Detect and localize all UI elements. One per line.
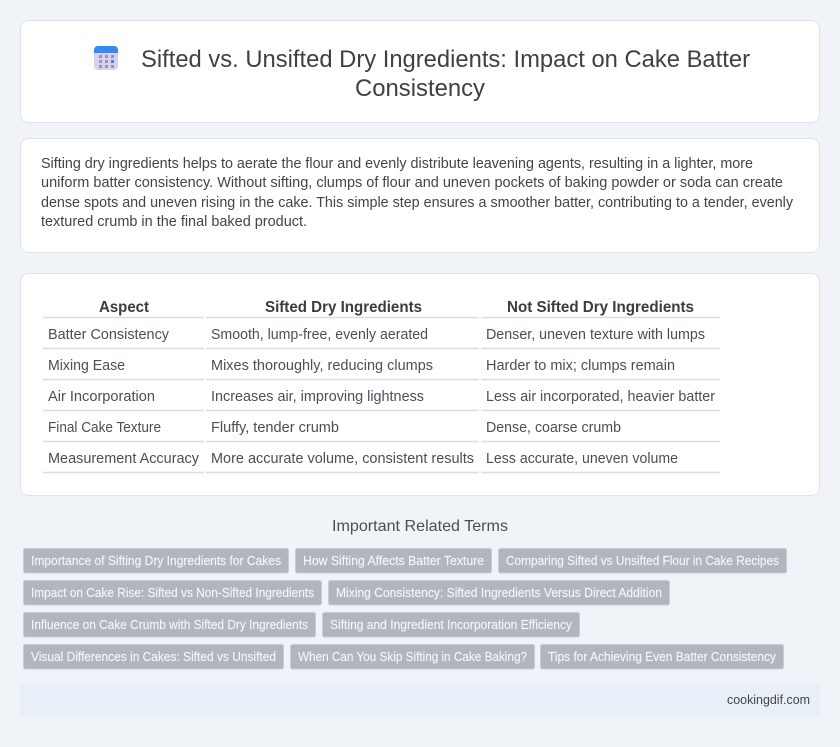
header panel: [20, 20, 820, 122]
table header: Aspect: [99, 299, 150, 316]
related term tags: [24, 548, 786, 669]
tag 9: When Can You Skip Sifting in Cake Baking?: [298, 650, 527, 664]
title: Consistency: [355, 75, 485, 102]
tag 1: [24, 548, 288, 573]
table header: [99, 299, 694, 316]
footer: cookingdif.com: [727, 693, 810, 707]
footer: [20, 683, 820, 717]
row: mixing ease: [48, 358, 675, 374]
tag 10: Tips for Achieving Even Batter Consistency: [548, 650, 777, 664]
row: air incorporation: Less air incorporated, heavier batter: [486, 389, 715, 405]
table header: Not Sifted Dry Ingredients: [507, 299, 694, 316]
panel: intro paragraph: [20, 138, 820, 252]
tag 5: Mixing Consistency: Sifted Ingredients Versus Direct Addition: [336, 586, 662, 600]
row: final cake texture: Final Cake Texture: [48, 420, 161, 436]
tag 3: [498, 548, 786, 573]
tag 9: [290, 644, 534, 669]
tag 8: [24, 644, 284, 669]
panel: intro paragraph: dense spots and uneven rising in the cake. This simple step ensures a smoother batter, contributing to a tender, evenly: [41, 195, 794, 211]
panel: intro paragraph: Sifting dry ingredients helps to aerate the flour and evenly distribute leavening agents, resulting in a lighter, more: [41, 156, 753, 172]
related terms heading: Important Related Terms: [332, 518, 508, 535]
row: air incorporation: [48, 389, 715, 405]
row: air incorporation: Increases air, improving lightness: [211, 389, 424, 405]
tag 10: [540, 644, 784, 669]
row: measurement accuracy: Measurement Accuracy: [48, 451, 200, 467]
row: measurement accuracy: More accurate volume, consistent results: [211, 451, 474, 467]
panel: intro paragraph: textured crumb in the final baked product.: [41, 214, 307, 230]
title: Sifted vs. Unsifted Dry Ingredients: Impact on Cake Batter: [141, 46, 750, 73]
tag 4: Impact on Cake Rise: Sifted vs Non-Sifted Ingredients: [31, 586, 314, 600]
row: batter consistency: Smooth, lump-free, evenly aerated: [211, 327, 428, 343]
panel: comparison table: [20, 274, 820, 496]
row: batter consistency: Batter Consistency: [48, 327, 170, 343]
row: final cake texture: [48, 420, 621, 436]
tag 2: [296, 548, 492, 573]
tag 3: Comparing Sifted vs Unsifted Flour in Cake Recipes: [506, 554, 779, 568]
row: mixing ease: Mixes thoroughly, reducing clumps: [211, 358, 433, 374]
tag 8: Visual Differences in Cakes: Sifted vs Unsifted: [31, 650, 276, 664]
row: batter consistency: [48, 327, 705, 343]
tag 4: [24, 580, 322, 605]
row: mixing ease: Mixing Ease: [48, 358, 125, 374]
row: measurement accuracy: Less accurate, uneven volume: [486, 451, 678, 467]
row: measurement accuracy: [48, 451, 678, 467]
tag 5: [328, 580, 670, 605]
row: final cake texture: Fluffy, tender crumb: [211, 420, 339, 436]
tag 7: Sifting and Ingredient Incorporation Efficiency: [330, 618, 573, 632]
tag 1: Importance of Sifting Dry Ingredients for Cakes: [31, 554, 281, 568]
row: mixing ease: Harder to mix; clumps remain: [486, 358, 675, 374]
row: air incorporation: Air Incorporation: [48, 389, 155, 405]
tag 6: [24, 612, 316, 637]
tag 6: Influence on Cake Crumb with Sifted Dry Ingredients: [31, 618, 308, 632]
tag 2: How Sifting Affects Batter Texture: [303, 554, 484, 568]
icon: calendar: [94, 46, 118, 70]
row: batter consistency: Denser, uneven texture with lumps: [486, 327, 705, 343]
row: final cake texture: Dense, coarse crumb: [486, 420, 621, 436]
tag 7: [322, 612, 580, 637]
table header: Sifted Dry Ingredients: [265, 299, 422, 316]
panel: intro paragraph: uniform batter consistency. Without sifting, clumps of flour and uneven pockets of baking powder or soda can create: [41, 175, 783, 191]
title: [141, 46, 750, 102]
